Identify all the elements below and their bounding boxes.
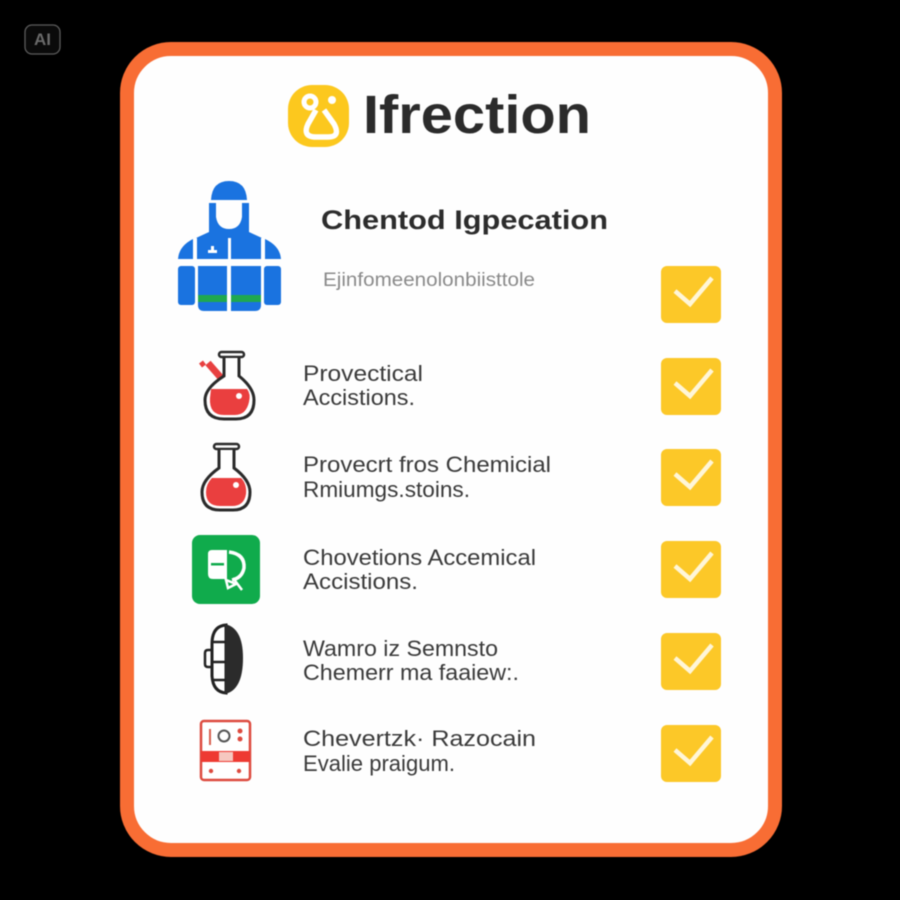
text: row 4: Chemerr ma faaiew:. (303, 660, 519, 685)
text: row 4: Wamro iz Semnsto (303, 636, 498, 661)
text: row 5 (303, 726, 536, 776)
text: row 3: Chovetions Accemical (303, 545, 536, 570)
checkbox 5 (661, 633, 721, 690)
heading: Chentod Igpecation (321, 205, 608, 235)
logo icon (288, 85, 349, 147)
text: row 5: Evalie praigum. (303, 751, 455, 776)
icon: protective suit (178, 181, 281, 311)
icon: green badge (192, 535, 260, 604)
title: Ifrection (363, 85, 591, 145)
subheading: Ejinfomeenolonbiisttole (323, 270, 535, 291)
text: row 1 (303, 361, 423, 410)
panel: card (127, 49, 775, 850)
text: row 3: Accistions. (303, 569, 418, 594)
icon: flask with side arm (201, 352, 254, 419)
checkbox 6 (661, 725, 721, 782)
text: row 3 (303, 545, 536, 594)
icon: flask (202, 444, 250, 510)
text: row 2: Rmiumgs.stoins. (303, 477, 470, 502)
icon: red control panel (201, 721, 250, 780)
text: row 1: Provectical (303, 361, 423, 386)
checkbox 4 (661, 541, 721, 598)
checkbox 2 (661, 358, 721, 415)
AI badge: AI (34, 30, 51, 49)
text: row 2: Provecrt fros Chemicial (303, 452, 551, 477)
text: row 2 (303, 452, 551, 502)
text: row 4 (303, 636, 519, 685)
text: row 5: Chevertzk· Razocain (303, 726, 536, 751)
checkbox 1 (661, 266, 721, 323)
icon: capsule gear (205, 624, 243, 694)
text: row 1: Accistions. (303, 385, 415, 410)
checkbox 3 (661, 449, 721, 506)
AI badge (25, 25, 60, 54)
